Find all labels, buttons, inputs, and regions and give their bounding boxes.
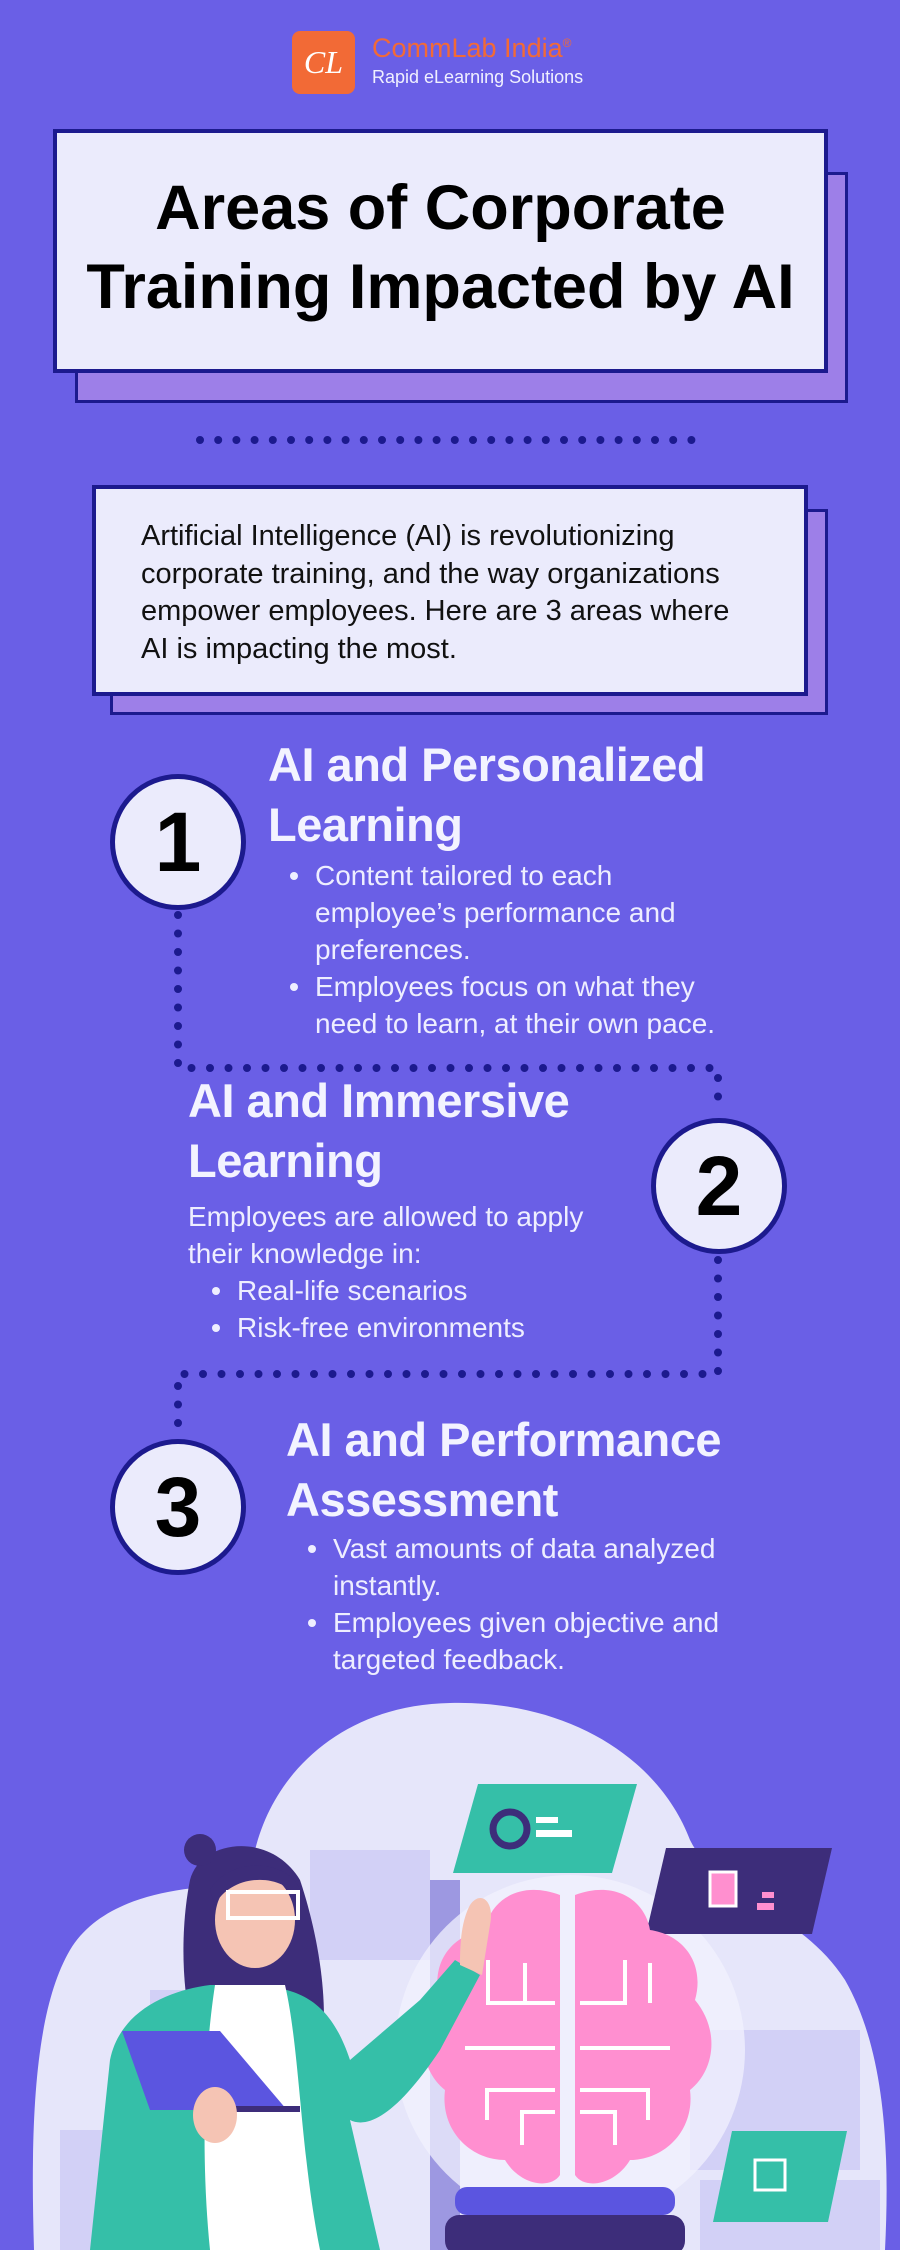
circle 2: 2 bbox=[696, 1138, 742, 1232]
heading 1: Learning bbox=[268, 798, 462, 851]
bullets 1: Content tailored to each bbox=[315, 860, 612, 891]
bullets 3: Employees given objective and bbox=[333, 1607, 719, 1638]
logo: CommLab India® bbox=[372, 33, 571, 63]
brain base bbox=[455, 2187, 675, 2215]
heading 3 bbox=[286, 1413, 721, 1526]
text 2 bbox=[188, 1201, 584, 1343]
brain bbox=[424, 1890, 711, 2183]
small teal panel bbox=[713, 2131, 847, 2222]
heading 2: Learning bbox=[188, 1134, 382, 1187]
heading 1 bbox=[268, 738, 705, 851]
heading 3: Assessment bbox=[286, 1473, 558, 1526]
bullets 1 bbox=[290, 860, 715, 1039]
circle 1 bbox=[110, 774, 246, 910]
bullets 3: Vast amounts of data analyzed bbox=[333, 1533, 715, 1564]
heading 1: AI and Personalized bbox=[268, 738, 705, 791]
logo bbox=[292, 31, 583, 94]
bullets 3 bbox=[308, 1533, 719, 1675]
intro text bbox=[141, 520, 729, 664]
dotted connector 1-2 bbox=[178, 915, 718, 1112]
title: Areas of Corporate bbox=[155, 173, 726, 243]
heading 2: AI and Immersive bbox=[188, 1074, 569, 1127]
bullets 1: employee’s performance and bbox=[315, 897, 676, 928]
bullets 1: need to learn, at their own pace. bbox=[315, 1008, 715, 1039]
section 2 bbox=[188, 1074, 584, 1343]
title: Training Impacted by AI bbox=[86, 252, 795, 322]
icon: CL logo: CL bbox=[304, 44, 343, 80]
dotted divider bbox=[200, 436, 692, 444]
glow circle bbox=[395, 1875, 745, 2225]
dark chip panel bbox=[646, 1848, 832, 1934]
circle 3: 3 bbox=[155, 1460, 201, 1554]
intro text: Artificial Intelligence (AI) is revolutionizing bbox=[141, 520, 674, 552]
text 2: Employees are allowed to apply bbox=[188, 1201, 583, 1232]
background blob bbox=[33, 1703, 887, 2250]
title panel bbox=[53, 129, 848, 403]
text 2: their knowledge in: bbox=[188, 1238, 421, 1269]
bullets 1: Employees focus on what they bbox=[315, 971, 695, 1002]
illustration: woman with AI brain bbox=[32, 1702, 887, 2250]
circle 1: 1 bbox=[155, 794, 201, 888]
heading 3: AI and Performance bbox=[286, 1413, 721, 1466]
logo: Rapid eLearning Solutions bbox=[372, 67, 583, 87]
icon: CL logo bbox=[292, 31, 355, 94]
heading 2 bbox=[188, 1074, 569, 1187]
intro text: AI is impacting the most. bbox=[141, 632, 457, 664]
teal panel bbox=[453, 1784, 637, 1873]
text 2: Real-life scenarios bbox=[237, 1275, 467, 1306]
grid panels bbox=[60, 1850, 880, 2250]
bullets 3: instantly. bbox=[333, 1570, 441, 1601]
bullets 3: targeted feedback. bbox=[333, 1644, 565, 1675]
woman bbox=[90, 1834, 491, 2250]
intro text: corporate training, and the way organizations bbox=[141, 558, 720, 590]
text 2: Risk-free environments bbox=[237, 1312, 525, 1343]
section 1 bbox=[268, 738, 715, 1039]
circle 3 bbox=[110, 1439, 246, 1575]
dotted connector 2-3 bbox=[178, 1260, 718, 1435]
bullets 1: preferences. bbox=[315, 934, 471, 965]
circle 2 bbox=[651, 1118, 787, 1254]
title bbox=[86, 173, 795, 322]
intro text: empower employees. Here are 3 areas where bbox=[141, 595, 729, 627]
section 3 bbox=[286, 1413, 721, 1675]
intro panel bbox=[92, 485, 828, 715]
